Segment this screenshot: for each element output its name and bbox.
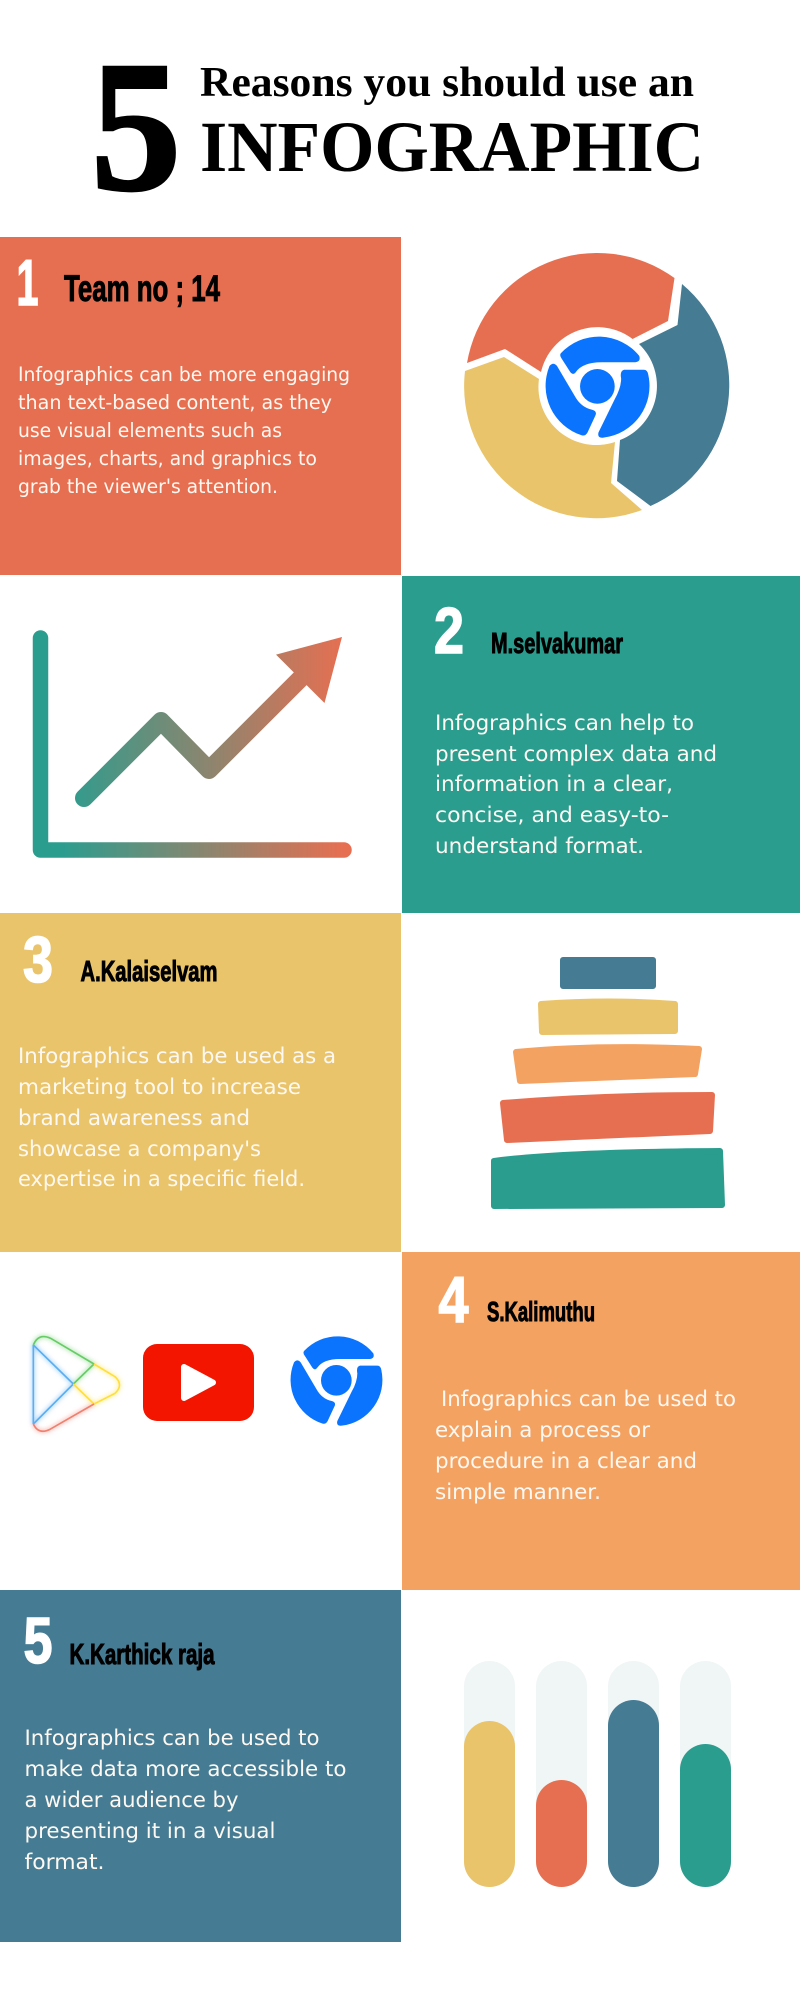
chart: stacked pyramid bars <box>494 960 722 1206</box>
ring segment: blue <box>617 284 729 506</box>
panel 4 text <box>435 1387 736 1505</box>
panel 5 text: a wider audience by <box>24 1788 239 1813</box>
ring segment: yellow <box>464 357 642 518</box>
panel 3 text: Infographics can be used as a <box>18 1044 336 1069</box>
bar value: teal <box>680 1744 731 1887</box>
pyramid bar: blue <box>563 960 653 986</box>
arrow head <box>276 637 342 703</box>
video logo red rectangle <box>143 1344 254 1421</box>
bar track 2 <box>536 1661 587 1887</box>
pyramid bar: teal <box>494 1151 722 1206</box>
panel 2: complex data <box>402 576 800 913</box>
panel 3 text: expertise in a specific field. <box>18 1167 305 1192</box>
panel 1 text: grab the viewer's attention. <box>18 475 278 498</box>
number 3: 3 <box>23 923 53 996</box>
number 4: 4 <box>438 1263 468 1336</box>
icon: video play logo <box>143 1344 254 1421</box>
number 1: 1 <box>16 246 38 319</box>
panel 4 background <box>402 1252 800 1590</box>
panel 4 text: procedure in a clear and <box>435 1449 697 1474</box>
title <box>91 24 704 230</box>
video logo play triangle <box>184 1367 213 1398</box>
panel 2 text: Infographics can help to <box>435 711 694 736</box>
panel 5 background <box>0 1590 401 1942</box>
panel 3: marketing tool <box>0 913 401 1252</box>
panel 1 background <box>0 237 401 575</box>
chart axes <box>40 638 344 850</box>
title line 2: INFOGRAPHIC <box>200 107 704 187</box>
panel 2 text: concise, and easy-to- <box>435 803 669 828</box>
chart: rounded vertical bars <box>464 1661 731 1887</box>
bar track 1 <box>464 1661 515 1887</box>
icon: blue browser logo <box>546 337 650 438</box>
bar value: yellow <box>464 1721 515 1887</box>
pyramid bar: yellow <box>541 1002 675 1032</box>
heading: M.selvakumar: M.selvakumar <box>491 628 623 660</box>
chart: rising line graph <box>40 637 344 850</box>
panel 3 text <box>18 1044 336 1192</box>
panel 2 background <box>402 576 800 913</box>
bar track 3 <box>608 1661 659 1887</box>
rising line <box>84 678 301 798</box>
panel 3 text: brand awareness and <box>18 1106 250 1131</box>
number 2: 2 <box>434 594 464 667</box>
pyramid bar: red <box>503 1095 712 1140</box>
big number 5: 5 <box>91 24 181 230</box>
heading: K.Karthick raja: K.Karthick raja <box>70 1639 215 1671</box>
panel 5 text: Infographics can be used to <box>24 1726 320 1751</box>
panel 5 text: presenting it in a visual <box>24 1819 276 1844</box>
panel 1 text: use visual elements such as <box>18 419 282 442</box>
panel 1 text: Infographics can be more engaging <box>18 363 350 386</box>
panel 4 text: simple manner. <box>435 1480 601 1505</box>
bar value: blue <box>608 1700 659 1887</box>
panel 3 background <box>0 913 401 1252</box>
panel 4 text: explain a process or <box>435 1418 650 1443</box>
panel 5 text: make data more accessible to <box>24 1757 346 1782</box>
panel 3 text: marketing tool to increase <box>18 1075 301 1100</box>
panel 2 text: information in a clear, <box>435 772 673 797</box>
icon row: app logos <box>33 1336 382 1431</box>
chart: segmented ring with browser icon <box>464 253 729 518</box>
panel 4 text: Infographics can be used to <box>441 1387 736 1412</box>
panel 5 text: format. <box>24 1850 104 1875</box>
heading: A.Kalaiselvam: A.Kalaiselvam <box>80 956 218 988</box>
panel 3 text: showcase a company's <box>18 1137 261 1162</box>
ring segment: red <box>467 253 674 372</box>
title line 1: Reasons you should use an <box>200 60 694 106</box>
pyramid bar: orange <box>516 1047 699 1081</box>
panel 2 text: understand format. <box>435 834 644 859</box>
panel 2 text <box>435 711 717 859</box>
bar value: red <box>536 1780 587 1887</box>
panel 2 text: present complex data and <box>435 742 717 767</box>
number 5: 5 <box>24 1604 52 1677</box>
heading: S.Kalimuthu: S.Kalimuthu <box>487 1296 595 1327</box>
panel 5 text <box>24 1726 346 1875</box>
panel 5: accessible data <box>0 1590 401 1942</box>
icon: play store neon triangle <box>33 1337 119 1431</box>
panel 4: explain a process <box>402 1252 800 1590</box>
panel 1 text: images, charts, and graphics to <box>18 447 317 470</box>
panel 1 text: than text-based content, as they <box>18 391 332 414</box>
panel 1 text <box>18 363 350 498</box>
heading: team number: Team no ; 14 <box>64 268 220 309</box>
panel 1: engaging <box>0 237 401 575</box>
bar track 4 <box>680 1661 731 1887</box>
icon: blue browser logo small <box>291 1336 382 1426</box>
